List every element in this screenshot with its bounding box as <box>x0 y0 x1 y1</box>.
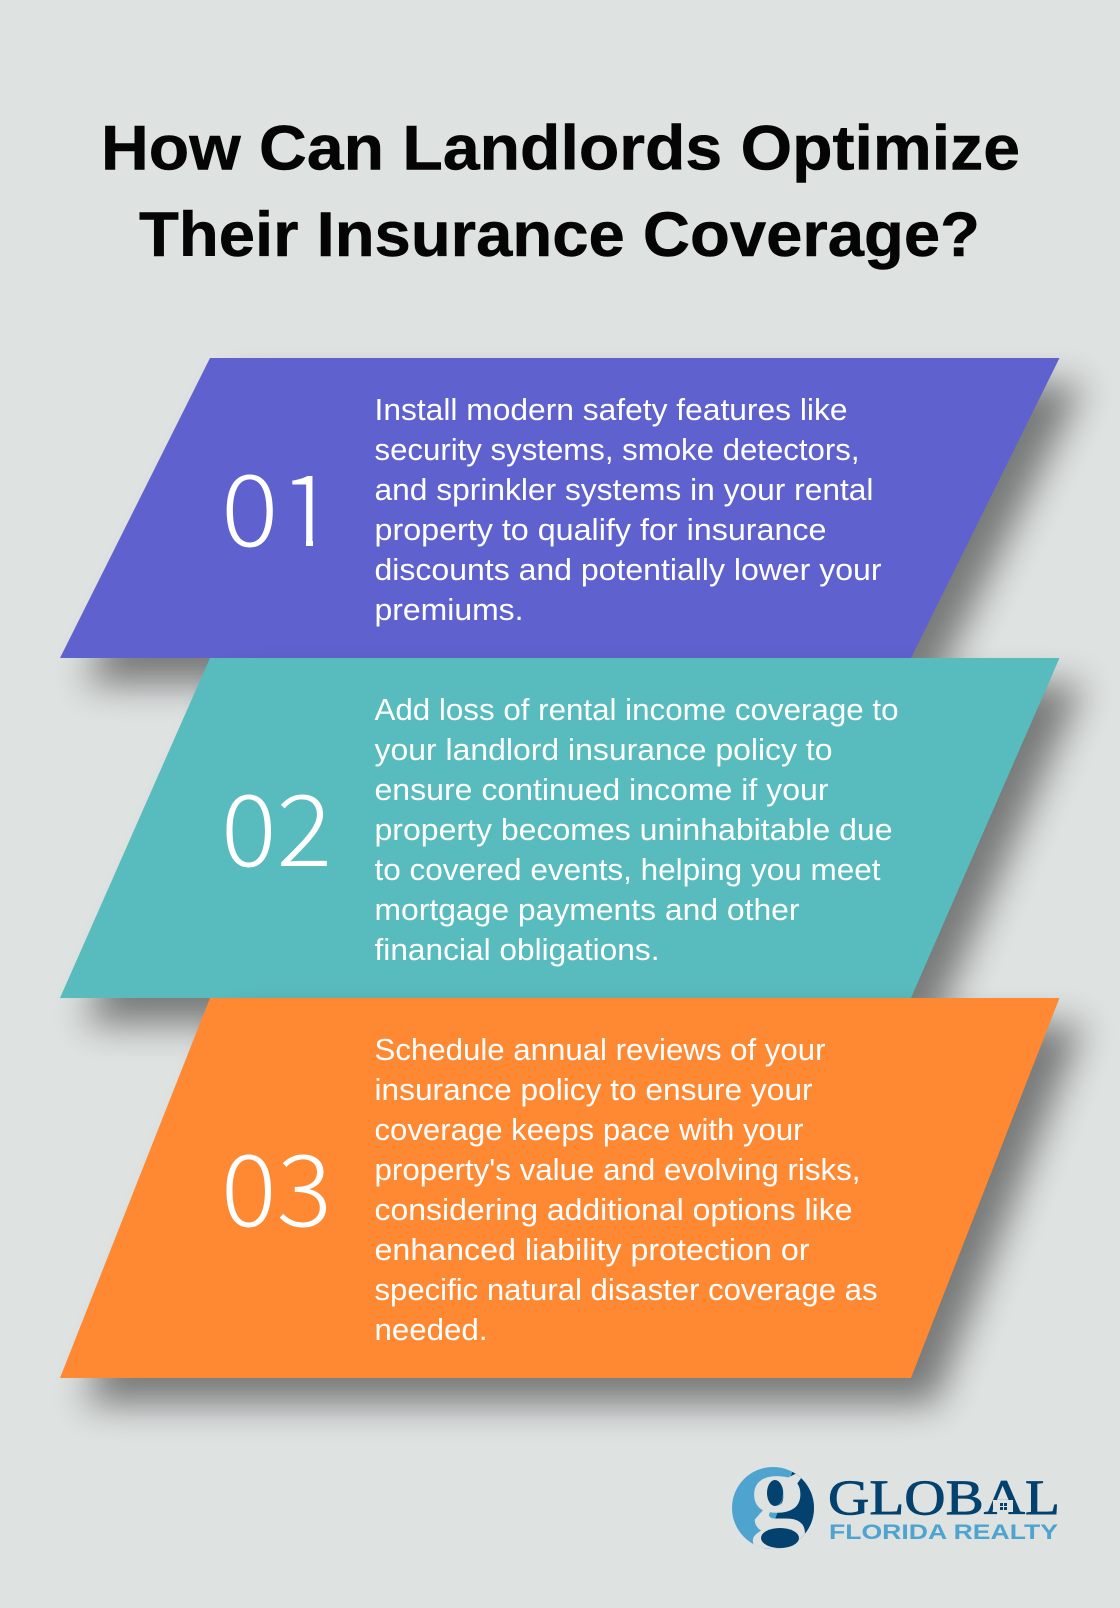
step number 01: 01 <box>221 431 336 575</box>
icon: g roundel: g <box>751 1433 805 1552</box>
description text 01: discounts and potentially lower your <box>374 553 882 587</box>
description text 01: security systems, smoke detectors, <box>374 433 860 467</box>
description text 01: property to qualify for insurance <box>374 513 826 547</box>
description text 03 <box>374 1033 878 1347</box>
description text 03: specific natural disaster coverage as <box>374 1273 878 1307</box>
description text 02: financial obligations. <box>374 933 660 967</box>
icon: g roundel <box>732 1467 814 1549</box>
description text 01 <box>374 393 882 627</box>
wordmark: FLORIDA REALTY: FLORIDA REALTY <box>829 1521 1058 1544</box>
description text 03: coverage keeps pace with your <box>374 1113 804 1147</box>
description text 02 <box>374 693 898 967</box>
description text 01: premiums. <box>374 593 524 627</box>
description text 01: and sprinkler systems in your rental <box>374 473 874 507</box>
description text 02: mortgage payments and other <box>374 893 800 927</box>
description text 03: needed. <box>374 1313 488 1347</box>
description text 01: Install modern safety features like <box>374 393 848 427</box>
logo: Global Florida Realty <box>732 1467 1058 1549</box>
description text 03: Schedule annual reviews of your <box>374 1033 826 1067</box>
description text 02: ensure continued income if your <box>374 773 828 807</box>
step number 03: 03 <box>221 1111 332 1255</box>
panel: step 03 <box>60 998 1060 1378</box>
description text 03: insurance policy to ensure your <box>374 1073 812 1107</box>
description text 02: property becomes uninhabitable due <box>374 813 892 847</box>
wordmark: GLOBAL: GLOBAL <box>828 1469 1060 1525</box>
description text 02: Add loss of rental income coverage to <box>374 693 898 727</box>
description text 03: enhanced liability protection or <box>374 1233 810 1267</box>
title: How Can Landlords Optimize <box>101 114 1020 184</box>
panel: step 01 <box>60 358 1060 658</box>
step number 02: 02 <box>221 751 332 895</box>
description text 02: your landlord insurance policy to <box>374 733 832 767</box>
title: Their Insurance Coverage? <box>139 200 980 270</box>
description text 03: considering additional options like <box>374 1193 852 1227</box>
description text 02: to covered events, helping you meet <box>374 853 881 887</box>
panel: step 02 <box>60 658 1060 998</box>
title <box>101 114 1020 270</box>
icon: house window in wordmark <box>993 1500 1013 1512</box>
description text 03: property's value and evolving risks, <box>374 1153 860 1187</box>
